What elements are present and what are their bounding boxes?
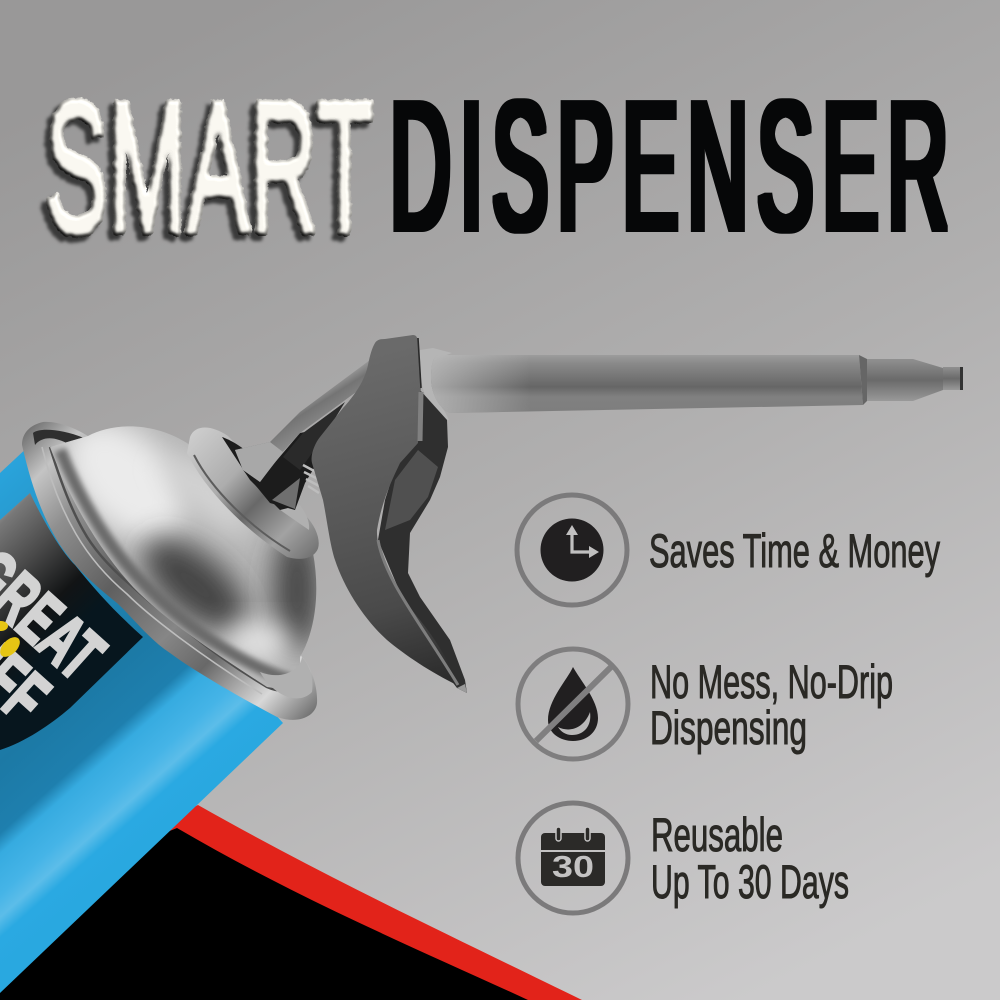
icon: crossed out drop (518, 649, 628, 759)
label second line: Dispensing (650, 701, 807, 754)
title word: SMART: SMART (45, 64, 373, 270)
red and black swoosh (0, 805, 582, 1000)
title word: SMART: SMART (40, 69, 368, 275)
can body (0, 445, 283, 993)
title word: DISPENSER: DISPENSER (390, 65, 957, 269)
can lid rim (22, 422, 317, 720)
feature: reusable up to 30 days (518, 803, 849, 913)
feature: no mess no drip (518, 649, 893, 759)
trigger (312, 335, 467, 693)
neck ring (187, 428, 319, 559)
dispenser tube (420, 348, 963, 420)
valve stem (235, 360, 370, 510)
spring (303, 465, 319, 493)
icon: calendar: 30 (552, 849, 594, 884)
label: Reusable (651, 808, 783, 861)
trigger face (312, 335, 459, 686)
feature: saves time and money (517, 495, 940, 605)
icon: clock (517, 495, 627, 605)
icon: calendar (518, 803, 628, 913)
can flange (260, 657, 313, 698)
can dome (50, 426, 316, 688)
title (40, 64, 957, 275)
can label (0, 493, 143, 750)
title word: SMART (40, 64, 373, 275)
brand name (0, 552, 110, 715)
spray can (0, 397, 330, 993)
trigger back plate (378, 390, 467, 693)
label second line: Up To 30 Days (651, 855, 849, 908)
